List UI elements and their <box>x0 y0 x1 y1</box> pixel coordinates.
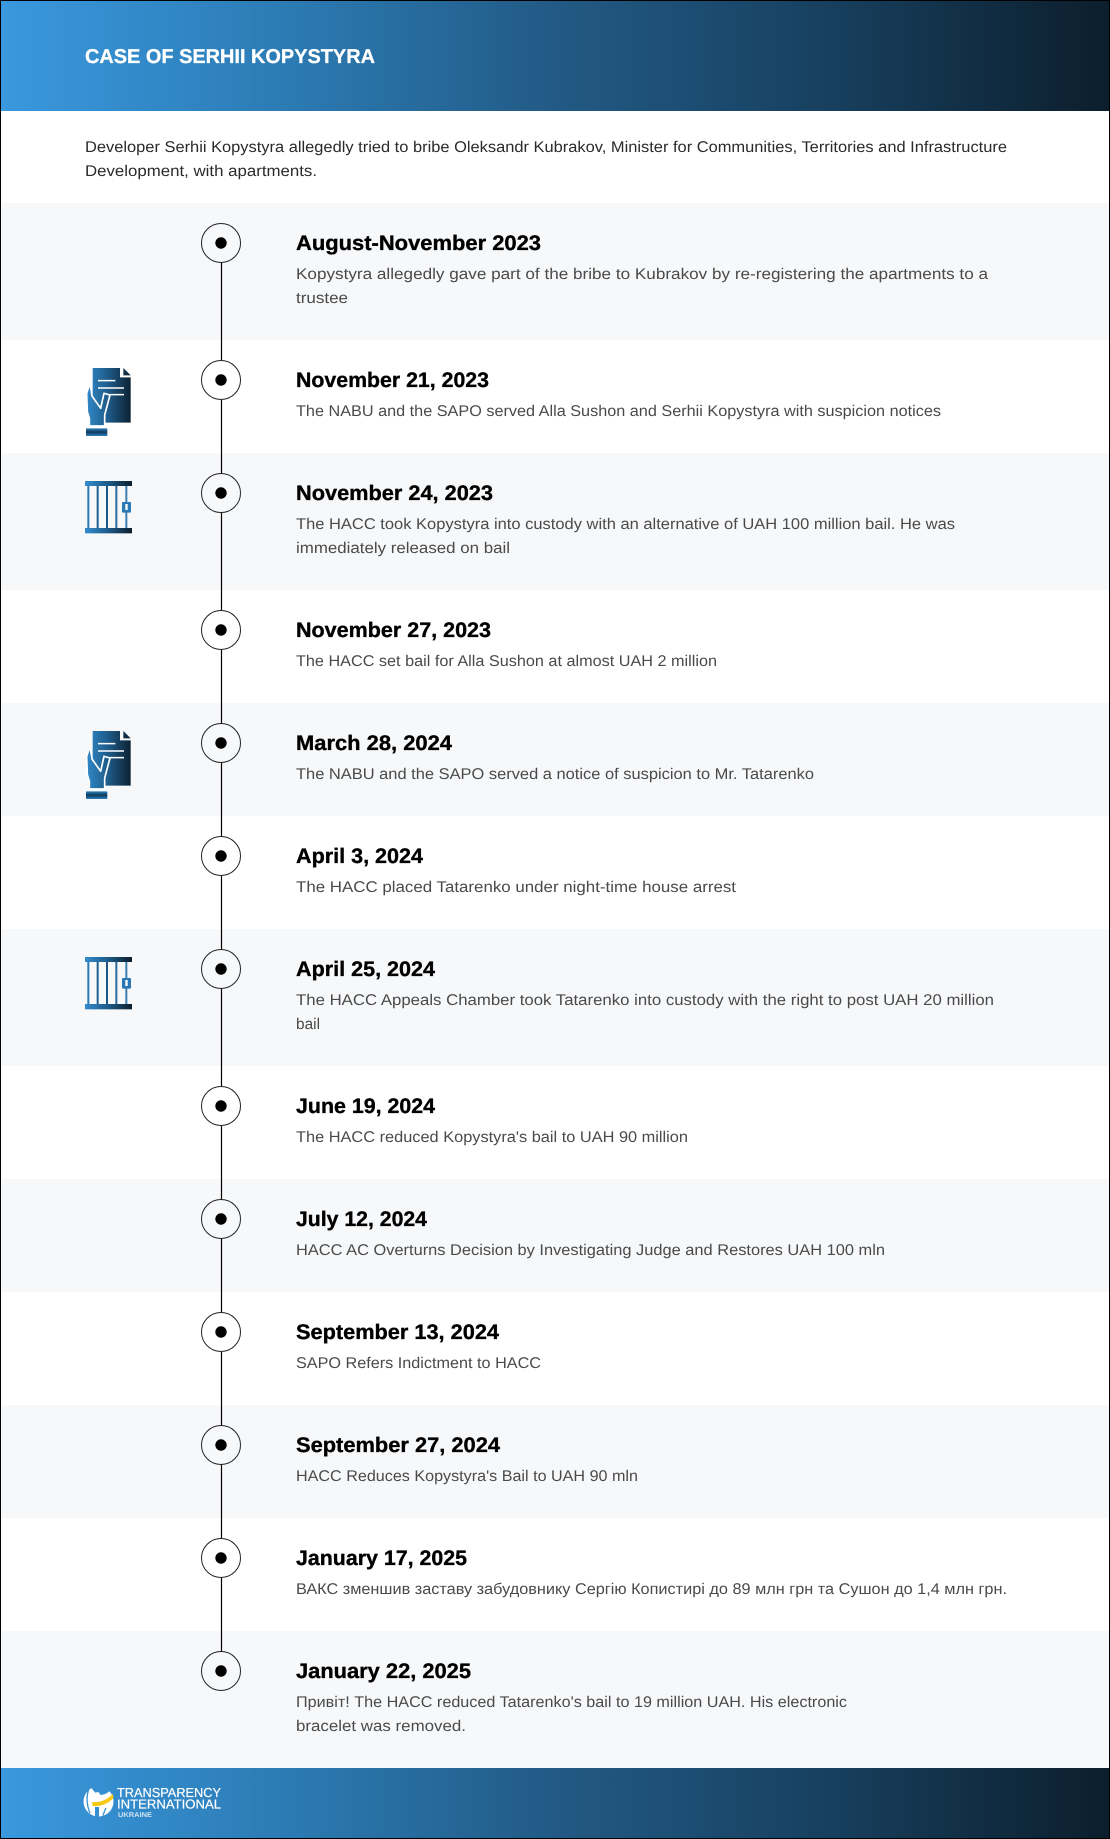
title: CASE OF SERHII KOPYSTYRA <box>85 46 375 68</box>
event: April 3, 2024 <box>202 836 737 896</box>
event: June 19, 2024: June 19, 2024 <box>296 1095 435 1118</box>
event: January 17, 2025: January 17, 2025 <box>296 1547 467 1570</box>
icon: jail bars <box>85 957 132 1009</box>
logo: Transparency International Ukraine <box>84 1785 221 1819</box>
event: November 21, 2023 <box>202 360 941 420</box>
event: August-November 2023 <box>202 224 988 307</box>
event: March 28, 2024 <box>202 724 814 783</box>
event: April 3, 2024: The HACC placed Tatarenko under night-time house arrest <box>296 879 737 896</box>
logo: Transparency International Ukraine: UKRAINE <box>118 1812 152 1819</box>
event: January 22, 2025: Привіт! The HACC reduced Tatarenko's bail to 19 million UAH. His electronic <box>296 1694 847 1711</box>
event: March 28, 2024: March 28, 2024 <box>296 732 452 755</box>
event: November 27, 2023: November 27, 2023 <box>296 619 491 642</box>
intro text: Development, with apartments. <box>85 163 317 180</box>
event: August-November 2023: Kopystyra allegedly gave part of the bribe to Kubrakov by re-registering the apartments to a <box>296 266 988 283</box>
event: November 24, 2023: The HACC took Kopystyra into custody with an alternative of UAH 100 million bail. He was <box>296 516 955 533</box>
icon: document in hand <box>86 731 131 799</box>
event: January 22, 2025: January 22, 2025 <box>296 1660 471 1683</box>
event: November 27, 2023 <box>202 610 717 670</box>
event: July 12, 2024: July 12, 2024 <box>296 1208 427 1231</box>
event: November 24, 2023: immediately released on bail <box>296 540 510 557</box>
event: July 12, 2024: HACC AC Overturns Decision by Investigating Judge and Restores UAH 100 mln <box>296 1242 885 1259</box>
event: June 19, 2024: The HACC reduced Kopystyra's bail to UAH 90 million <box>296 1129 688 1146</box>
event: November 21, 2023: The NABU and the SAPO served Alla Sushon and Serhii Kopystyra with suspicion notices <box>296 403 941 420</box>
event: August-November 2023: trustee <box>296 290 348 307</box>
footer banner <box>1 1768 1109 1838</box>
event: September 13, 2024 <box>202 1312 541 1372</box>
event: September 27, 2024 <box>202 1426 638 1485</box>
event: September 27, 2024: HACC Reduces Kopystyra's Bail to UAH 90 mln <box>296 1468 638 1485</box>
logo: Transparency International Ukraine: INTERNATIONAL <box>117 1796 221 1812</box>
event: June 19, 2024 <box>202 1086 688 1146</box>
event: September 13, 2024: SAPO Refers Indictment to HACC <box>296 1355 541 1372</box>
event: July 12, 2024 <box>202 1200 885 1259</box>
event: April 25, 2024: bail <box>296 1016 320 1033</box>
timeline vertical line <box>220 243 222 1671</box>
event: November 24, 2023: November 24, 2023 <box>296 482 493 505</box>
event: April 25, 2024 <box>202 950 994 1033</box>
event: August-November 2023: August-November 2023 <box>296 232 541 255</box>
event: November 24, 2023 <box>202 474 955 557</box>
event: April 25, 2024: The HACC Appeals Chamber took Tatarenko into custody with the right to post UAH 20 million <box>296 992 994 1009</box>
header banner <box>1 1 1109 111</box>
event: April 3, 2024: April 3, 2024 <box>296 845 423 868</box>
intro text: Developer Serhii Kopystyra allegedly tried to bribe Oleksandr Kubrakov, Minister for Communities, Territories and Infrastructure <box>85 139 1007 156</box>
event: January 22, 2025 <box>202 1652 847 1735</box>
event: November 27, 2023: The HACC set bail for Alla Sushon at almost UAH 2 million <box>296 653 717 670</box>
logo: Transparency International Ukraine: TRANSPARENCY <box>117 1785 221 1800</box>
icon: jail bars <box>85 481 132 533</box>
event: September 27, 2024: September 27, 2024 <box>296 1434 500 1457</box>
event: September 13, 2024: September 13, 2024 <box>296 1321 499 1344</box>
event: January 17, 2025: ВАКС зменшив заставу забудовнику Сергію Копистирі до 89 млн грн та Сушон до 1,4 млн грн. <box>296 1581 1007 1598</box>
event: March 28, 2024: The NABU and the SAPO served a notice of suspicion to Mr. Tatarenko <box>296 766 814 783</box>
event: April 25, 2024: April 25, 2024 <box>296 958 435 981</box>
event: January 22, 2025: bracelet was removed. <box>296 1718 466 1735</box>
event: January 17, 2025 <box>202 1538 1007 1598</box>
intro text <box>85 139 1007 180</box>
icon: document in hand <box>86 368 131 436</box>
event: November 21, 2023: November 21, 2023 <box>296 369 489 392</box>
